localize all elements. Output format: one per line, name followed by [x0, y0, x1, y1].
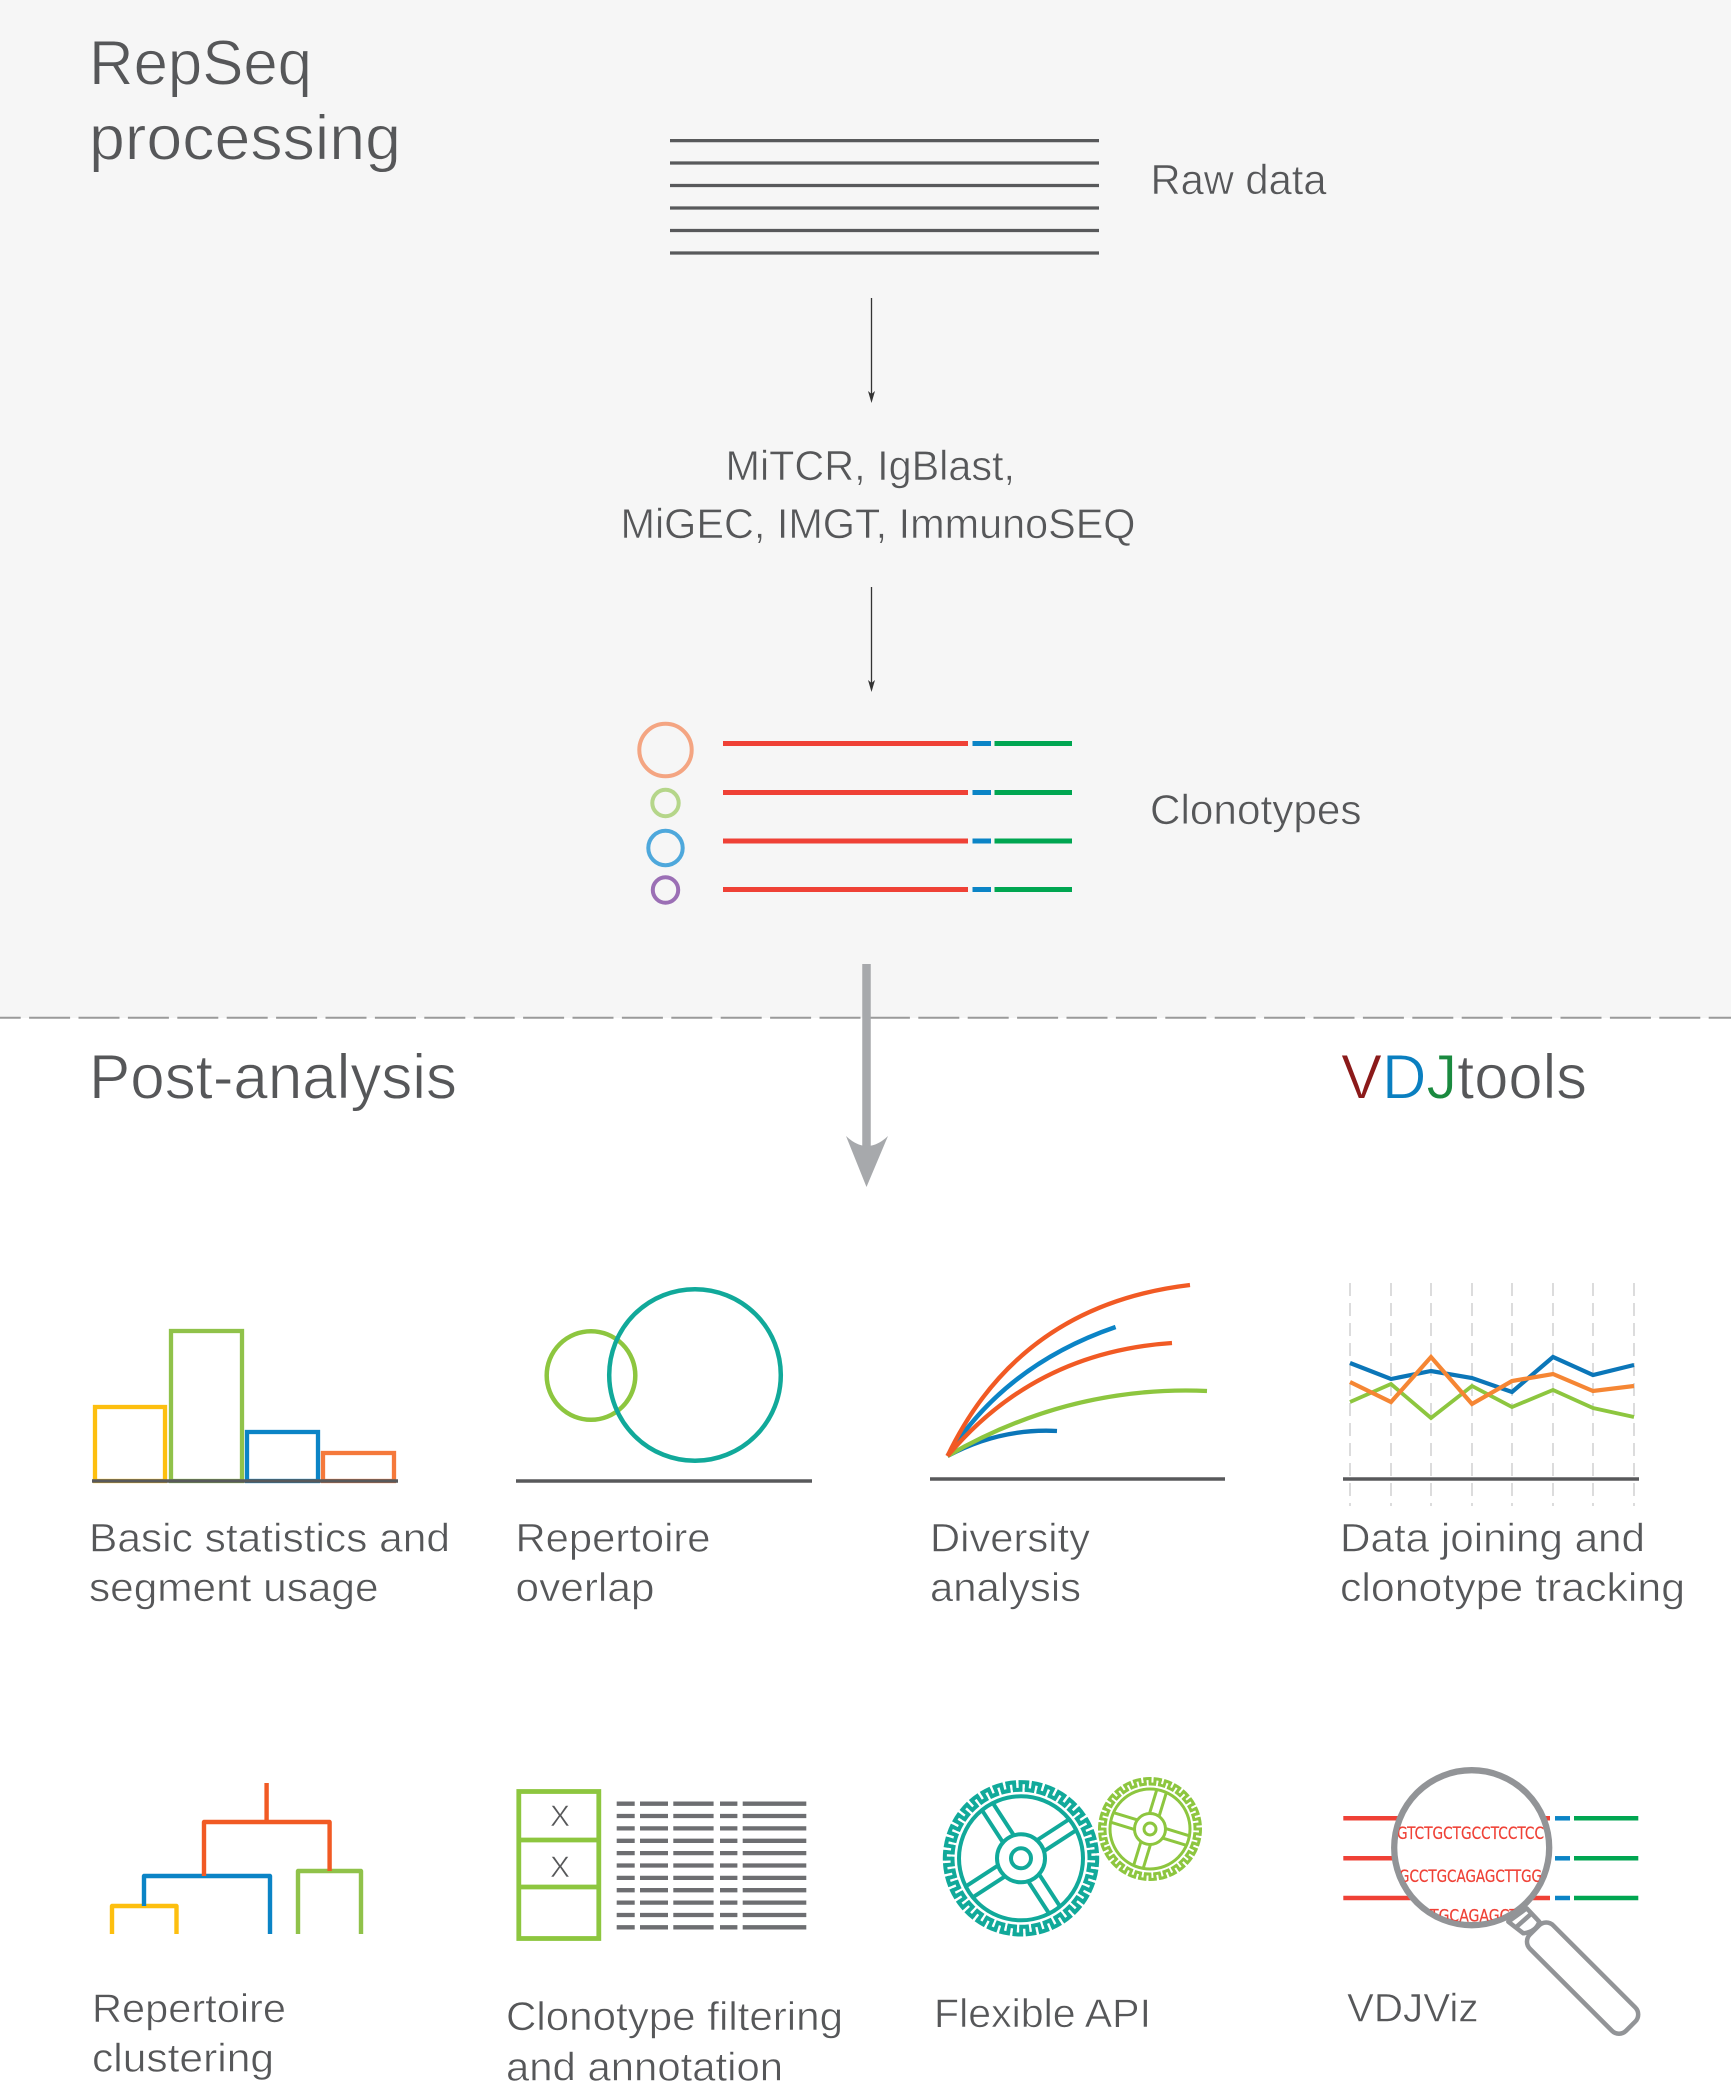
icon: magnifier: GTCTGCTGCCTCCTCC [1397, 1824, 1544, 1844]
label: and annotation [506, 2045, 783, 2089]
filter table [519, 1792, 806, 1938]
panel: flexible API [934, 1778, 1200, 2036]
icon: large gear [945, 1782, 1097, 1935]
icon: magnifier [1394, 1770, 1642, 2038]
rarefaction curves [930, 1285, 1225, 1479]
icon: clonotype frequency circles [639, 724, 692, 903]
panel: clonotype filtering and annotation [506, 1792, 843, 2089]
text: processing tools: MiTCR, IgBlast, [726, 442, 1015, 489]
filter table: X [550, 1800, 570, 1833]
label [1340, 1516, 1685, 1610]
filter table: X [550, 1851, 570, 1884]
icon: clonotype segments [723, 744, 1072, 890]
bar chart [92, 1331, 398, 1481]
venn diagram [516, 1289, 812, 1481]
label: Data joining and [1340, 1516, 1645, 1560]
heading: RepSeq processing: processing [89, 103, 401, 173]
label: raw data: Raw data [1150, 156, 1327, 203]
panel: repertoire clustering [92, 1783, 361, 2081]
label: Repertoire [516, 1516, 710, 1560]
arrow: raw data to tools [868, 298, 875, 403]
arrow: tools to clonotypes [868, 587, 875, 692]
icon: magnifier: TGCAGAGCT [1429, 1907, 1518, 1927]
label [516, 1516, 710, 1610]
label: Diversity [930, 1516, 1090, 1560]
heading: RepSeq processing [89, 28, 401, 173]
text: processing tools [620, 442, 1136, 547]
panel: basic statistics [89, 1331, 450, 1610]
label [89, 1516, 450, 1610]
panel: RepSeq processing [0, 0, 1731, 1018]
icon: small gear [1100, 1778, 1200, 1880]
label: clonotypes: Clonotypes [1150, 786, 1362, 833]
label: clonotype tracking [1340, 1566, 1685, 1610]
panel: repertoire overlap [516, 1289, 812, 1610]
label: Repertoire [92, 1987, 286, 2031]
label: overlap [516, 1566, 654, 1610]
icon: magnifier: GCCTGCAGAGCTTGG [1399, 1867, 1542, 1887]
text: processing tools: MiGEC, IMGT, ImmunoSEQ [620, 500, 1136, 547]
panel: VDJViz [1343, 1770, 1642, 2038]
icon: raw data lines [670, 141, 1099, 253]
label: Flexible API [934, 1992, 1151, 2036]
heading: VDJtools: VDJtools [1341, 1042, 1587, 1112]
dendrogram [112, 1783, 361, 1934]
label: VDJViz [1347, 1986, 1478, 2030]
label: segment usage [89, 1566, 378, 1610]
label: analysis [930, 1566, 1081, 1610]
label: Clonotype filtering [506, 1995, 843, 2039]
heading: RepSeq processing: RepSeq [89, 28, 312, 98]
icon: clonotype lines under magnifier [1343, 1818, 1638, 1898]
label [506, 1995, 843, 2089]
label: Basic statistics and [89, 1516, 450, 1560]
panel: diversity analysis [930, 1285, 1225, 1610]
line chart [1343, 1283, 1639, 1506]
heading: Post-analysis: Post-analysis [89, 1042, 457, 1112]
label [930, 1516, 1090, 1610]
label: clustering [92, 2037, 274, 2081]
panel: data joining and tracking [1340, 1283, 1685, 1610]
label [92, 1987, 286, 2081]
arrow: processing to post-analysis [846, 964, 888, 1187]
